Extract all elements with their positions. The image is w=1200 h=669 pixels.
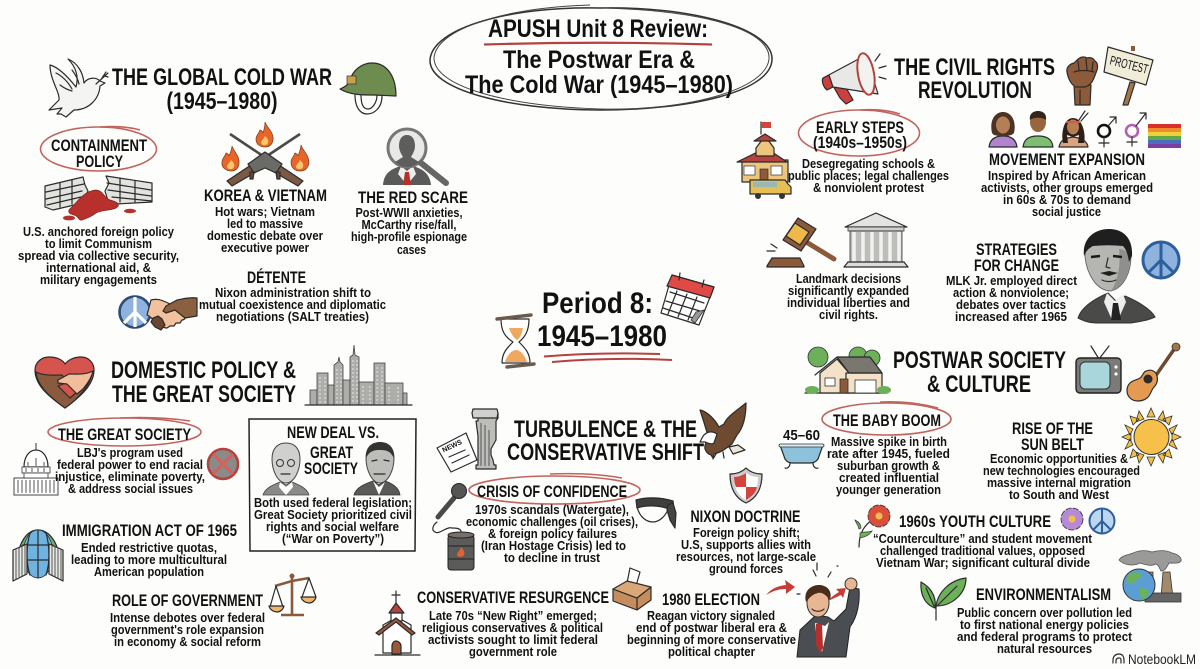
text: movement expansion body: activists, other groups emerged (981, 180, 1153, 195)
text: youth culture body (873, 531, 1093, 570)
text: baby boom body: younger generation (836, 482, 941, 497)
immigration act (13, 521, 237, 581)
icon: crossed-out circle (208, 449, 238, 479)
callout oval: containment policy (40, 127, 156, 171)
heading: postwar society: POSTWAR SOCIETY (893, 347, 1066, 374)
korea and vietnam (204, 122, 327, 255)
text: containment body: U.S. anchored foreign policy (23, 224, 175, 239)
the great society item (14, 418, 238, 496)
text: crisis body: to decline in trust (504, 550, 601, 565)
icon: hourglass (497, 315, 534, 367)
text: new deal body: Both used federal legislation; (254, 495, 412, 510)
subheading: youth culture: 1960s YOUTH CULTURE (899, 512, 1051, 531)
text: landmark body: Landmark decisions (796, 271, 901, 286)
conservative resurgence (375, 588, 609, 659)
subheading: sun belt: SUN BELT (1021, 435, 1084, 454)
text: conservative resurgence body: government role (469, 644, 557, 659)
text: new deal body (254, 495, 412, 546)
text: red scare body: Post-WWII anxieties, (356, 205, 462, 220)
icon: newspaper and broken column (437, 409, 498, 472)
text: korea and vietnam body (207, 204, 323, 255)
subheading: 1980 election: 1980 ELECTION (662, 590, 760, 609)
arrows: rising (766, 580, 846, 601)
text: containment body: to limit Communism (45, 236, 152, 251)
icon: magnifier over suspect (383, 129, 446, 185)
icon: broken wall (45, 176, 152, 220)
text: detente body (199, 285, 386, 324)
icon: city skyline (305, 345, 412, 405)
text: role of government body: government's role expansion (111, 622, 264, 637)
text: baby boom body: Massive spike in birth (831, 434, 947, 449)
panel: the civil rights revolution (737, 46, 1181, 324)
text: 1980 election body: Reagan victory signaled (647, 608, 775, 623)
heading: civil rights: REVOLUTION (918, 77, 1032, 104)
text: sun belt body (983, 451, 1140, 502)
icon: peace sign (1090, 508, 1114, 534)
icon: microphone (433, 484, 466, 533)
heading: period 8 (537, 287, 672, 362)
callout oval: baby boom (822, 402, 951, 435)
panel: turbulence and the conservative shift (375, 403, 859, 659)
text: crisis body (466, 502, 638, 565)
icon: leaves (921, 578, 966, 620)
subheading: strategies for change: STRATEGIES (976, 240, 1057, 259)
nixon doctrine (676, 468, 816, 576)
icon: fdr portrait (263, 443, 309, 495)
text: environmentalism body: to first national energy policies (960, 617, 1129, 632)
text: crisis body: 1970s scandals (Watergate), (475, 502, 629, 517)
text: strategies body: action & nonviolence; (953, 285, 1069, 300)
icon: bathtub (779, 444, 824, 468)
icon: raised fist (1067, 57, 1098, 105)
title: The Postwar Era & (503, 46, 695, 74)
text: great society body: LBJ's program used (77, 445, 183, 460)
subheading: new deal vs great society: NEW DEAL VS. (287, 423, 379, 442)
heading: turbulence (507, 416, 704, 466)
text: sun belt body: new technologies encouraged (983, 463, 1140, 478)
icon: globe and open gates (13, 530, 63, 581)
title (430, 5, 772, 110)
icon: lbj portrait (354, 442, 400, 495)
text: conservative resurgence body: religious conservatives & political (422, 620, 603, 635)
icon: sun (1122, 408, 1181, 466)
panel: the global cold war (18, 59, 468, 330)
subheading: early steps: EARLY STEPS (816, 118, 904, 137)
icon: red flower (855, 505, 890, 547)
text: detente body: mutual coexistence and diplomatic (199, 297, 386, 312)
icon: guitar (1127, 343, 1180, 401)
text: early steps body: Desegregating schools & (802, 156, 935, 171)
icon: calendar (661, 273, 714, 325)
callout oval: great society (48, 418, 201, 446)
text: immigration body (71, 540, 227, 579)
icon: courthouse (844, 213, 908, 267)
icon: newspaper and broken column: NEWS (441, 439, 464, 454)
1960s youth culture (855, 505, 1114, 570)
text: landmark body: significantly expanded (788, 283, 909, 298)
the baby boom (779, 402, 951, 497)
text: great society body (55, 445, 205, 496)
subheading: detente: DÉTENTE (247, 268, 306, 287)
icon: diverse people (989, 111, 1088, 147)
text: role of government body: Intense debotes over federal (110, 610, 265, 625)
subheading: immigration act: IMMIGRATION ACT OF 1965 (62, 521, 237, 540)
heading: turbulence: CONSERVATIVE SHIFT (507, 439, 704, 466)
early steps (737, 110, 949, 199)
text: containment body: international aid, & (46, 260, 151, 275)
panel: period 8 centre (497, 273, 714, 367)
icon: scales (269, 574, 316, 615)
text: immigration body: American population (94, 564, 204, 579)
panel: postwar society and culture (779, 343, 1181, 656)
subheading: containment policy: POLICY (76, 152, 123, 171)
text: early steps body (788, 156, 949, 195)
icon: polluting factory and earth (1119, 551, 1181, 602)
text: red scare body: high-profile espionage (351, 229, 467, 244)
subheading: nixon doctrine: NIXON DOCTRINE (690, 507, 800, 526)
subheading: baby boom: THE BABY BOOM (833, 411, 941, 430)
crisis of confidence (433, 474, 676, 570)
heading: period 8: 1945–1980 (537, 320, 667, 353)
strategies for change (946, 229, 1179, 324)
text: strategies body: debates over tactics (956, 297, 1066, 312)
text: movement expansion body: Inspired by African American (988, 168, 1146, 183)
environmentalism (921, 551, 1181, 656)
icon: gender symbols (1098, 113, 1146, 147)
text: conservative resurgence body: Late 70s “New Right” emerged; (429, 608, 597, 623)
text: 1980 election body: beginning of more conservative (627, 632, 796, 647)
text: crisis body: & foreign policy failures (488, 526, 617, 541)
text: korea and vietnam body: Hot wars; Vietnam (215, 204, 315, 219)
detente (120, 268, 386, 330)
title: APUSH Unit 8 Review: (488, 15, 708, 43)
subheading: movement expansion: MOVEMENT EXPANSION (989, 150, 1145, 169)
text: role of government body: in economy & social reform (114, 634, 261, 649)
subheading: sun belt (1012, 419, 1093, 454)
text: sun belt body: massive internal migration (987, 475, 1131, 490)
the red scare (351, 129, 468, 257)
landmark decisions (767, 213, 910, 322)
callout oval: crisis of confidence (469, 474, 640, 504)
text: detente body: negotiations (SALT treaties) (216, 309, 369, 324)
heading: the global cold war: (1945–1980) (166, 88, 278, 115)
heading: the global cold war (112, 64, 332, 115)
panel: domestic policy and the great society (13, 345, 416, 649)
heading: period 8: Period 8: (542, 287, 653, 320)
heading: domestic policy (111, 357, 296, 408)
text: strategies body (946, 273, 1078, 324)
text: role of government body (110, 610, 265, 649)
subheading: strategies for change (974, 240, 1059, 275)
text: baby boom body (827, 434, 950, 497)
icon: suburban house (805, 347, 891, 394)
text: great society body: & address social issues (68, 481, 193, 496)
text: landmark body: civil rights. (819, 307, 878, 322)
icon: heart handshake (35, 357, 94, 408)
subheading: korea and vietnam: KOREA & VIETNAM (204, 186, 327, 205)
text: baby boom body: rate after 1945, fueled (827, 446, 950, 461)
text: immigration body: Ended restrictive quotas, (81, 540, 217, 555)
text: early steps body: public places; legal challenges (788, 168, 949, 183)
subheading: sun belt: RISE OF THE (1012, 419, 1093, 438)
subheading: containment policy: CONTAINMENT (51, 136, 147, 155)
icon: schoolhouse and bus (737, 122, 791, 199)
icon: ballot box (613, 568, 651, 610)
icon: dove (49, 59, 108, 117)
heading: turbulence: TURBULENCE & THE (514, 416, 697, 443)
text: environmentalism body: and federal programs to protect (957, 629, 1133, 644)
text: new deal body: rights and social welfare (266, 519, 399, 534)
heading: civil rights: THE CIVIL RIGHTS (894, 54, 1055, 81)
icon: rainbow flag (1148, 124, 1181, 148)
text: great society body: federal power to end racial (57, 457, 203, 472)
icon: television (1076, 346, 1121, 393)
text: detente body: Nixon administration shift to (215, 285, 371, 300)
text: 1980 election body: political chapter (668, 644, 755, 659)
text: nixon doctrine body: ground forces (709, 561, 783, 576)
subheading: early steps: (1940s–1950s) (813, 133, 907, 152)
subheading: strategies for change: FOR CHANGE (974, 256, 1059, 275)
icon: peace sign (1143, 242, 1179, 278)
icon: megaphone (822, 52, 886, 104)
text: movement expansion body: social justice (1032, 204, 1101, 219)
text: red scare body (351, 205, 467, 257)
text: korea and vietnam body: executive power (221, 240, 309, 255)
subheading: the great society: THE GREAT SOCIETY (58, 425, 191, 444)
subheading: environmentalism: ENVIRONMENTALISM (976, 585, 1111, 604)
rise of the sun belt (983, 408, 1181, 502)
text: crisis body: (Iran Hostage Crisis) led to (481, 538, 626, 553)
subheading: role of government: ROLE OF GOVERNMENT (112, 591, 263, 610)
icon: eagle (700, 403, 746, 459)
heading: domestic policy: THE GREAT SOCIETY (112, 381, 296, 408)
text: nixon doctrine body: Foreign policy shift; (693, 525, 800, 540)
title: The Cold War (1945–1980) (465, 71, 733, 99)
subheading: containment policy (51, 136, 147, 171)
box: new deal vs great society (249, 419, 416, 551)
subheading: new deal vs great society (287, 423, 379, 478)
text: youth culture body: challenged traditional values, opposed (880, 543, 1085, 558)
icon: oil barrel (448, 532, 474, 570)
text: 1980 election body: end of postwar liberal era & (636, 620, 787, 635)
movement expansion (981, 111, 1181, 219)
text: environmentalism body: natural resources (997, 641, 1092, 656)
text: landmark body: individual liberties and (787, 295, 910, 310)
text: nixon doctrine body (676, 525, 816, 576)
icon: gavel (767, 218, 834, 267)
icon: mlk portrait (1078, 229, 1155, 323)
text: youth culture body: “Counterculture” and student movement (873, 531, 1093, 546)
callout oval: early steps (798, 110, 920, 156)
subheading: new deal vs great society: GREAT (310, 443, 353, 462)
text: sun belt body: to South and West (1009, 487, 1110, 502)
text: landmark body (787, 271, 910, 322)
text: movement expansion body: in 60s & 70s to demand (1003, 192, 1131, 207)
containment policy (18, 127, 179, 287)
icon: peace sign and handshake (120, 296, 197, 330)
heading: postwar society: & CULTURE (927, 371, 1031, 398)
text: red scare body: McCarthy rise/fall, (362, 217, 456, 232)
icon: protest sign (1104, 46, 1153, 105)
text: youth culture body: Vietnam War; significant cultural divide (876, 555, 1090, 570)
text: conservative resurgence body: activists sought to limit federal (428, 632, 598, 647)
icon: shield (730, 468, 762, 503)
text: nixon doctrine body: U.S, supports allies with (681, 537, 811, 552)
text: environmentalism body (957, 605, 1133, 656)
text: new deal body: Great Society prioritized civil (254, 507, 412, 522)
subheading: early steps (813, 118, 907, 152)
text: korea and vietnam body: led to massive (227, 216, 303, 231)
text: immigration body: leading to more multicultural (71, 552, 227, 567)
text: containment body (18, 224, 179, 287)
icon: protest sign: PROTEST (1108, 53, 1150, 77)
text: baby boom body: suburban growth & (837, 458, 940, 473)
1980 election (613, 563, 859, 659)
heading: the global cold war: THE GLOBAL COLD WAR (112, 64, 332, 91)
icon: capitol (14, 443, 58, 495)
text: sun belt body: Economic opportunities & (990, 451, 1128, 466)
text: containment body: military engagements (40, 272, 157, 287)
icon: army helmet (340, 63, 396, 114)
icon: purple flower (1061, 508, 1083, 530)
text: 1980 election body (627, 608, 796, 659)
icon: reagan waving (797, 563, 859, 657)
subheading: crisis of confidence: CRISIS OF CONFIDENCE (477, 482, 627, 501)
text: strategies body: MLK Jr. employed direct (946, 273, 1078, 288)
subheading: new deal vs great society: SOCIETY (304, 459, 358, 478)
text: great society body: injustice, eliminate poverty, (55, 469, 205, 484)
subheading: the red scare: THE RED SCARE (358, 188, 468, 207)
text: strategies body: increased after 1965 (955, 309, 1067, 324)
text: conservative resurgence body (422, 608, 603, 659)
icon: blindfold (636, 498, 676, 528)
text: containment body: spread via collective security, (18, 248, 179, 263)
text: new deal body: (“War on Poverty”) (282, 531, 384, 546)
icon: crossed rifles and flames (222, 122, 309, 186)
label: 45-60: 45–60 (783, 427, 820, 444)
heading: domestic policy: DOMESTIC POLICY & (111, 357, 296, 384)
text: movement expansion body (981, 168, 1153, 219)
text: red scare body: cases (397, 242, 426, 257)
icon: church (375, 591, 420, 655)
text: early steps body: & nonviolent protest (813, 180, 925, 195)
role of government (110, 574, 316, 649)
text: korea and vietnam body: domestic debate over (207, 228, 323, 243)
text: crisis body: economic challenges (oil crises), (466, 514, 638, 529)
heading: postwar society (893, 347, 1066, 398)
text: nixon doctrine body: resources, not large-scale (676, 549, 816, 564)
text: baby boom body: created influential (839, 470, 939, 485)
text: environmentalism body: Public concern over pollution led (957, 605, 1132, 620)
subheading: conservative resurgence: CONSERVATIVE RESURGENCE (417, 588, 609, 607)
heading: civil rights (894, 54, 1055, 104)
